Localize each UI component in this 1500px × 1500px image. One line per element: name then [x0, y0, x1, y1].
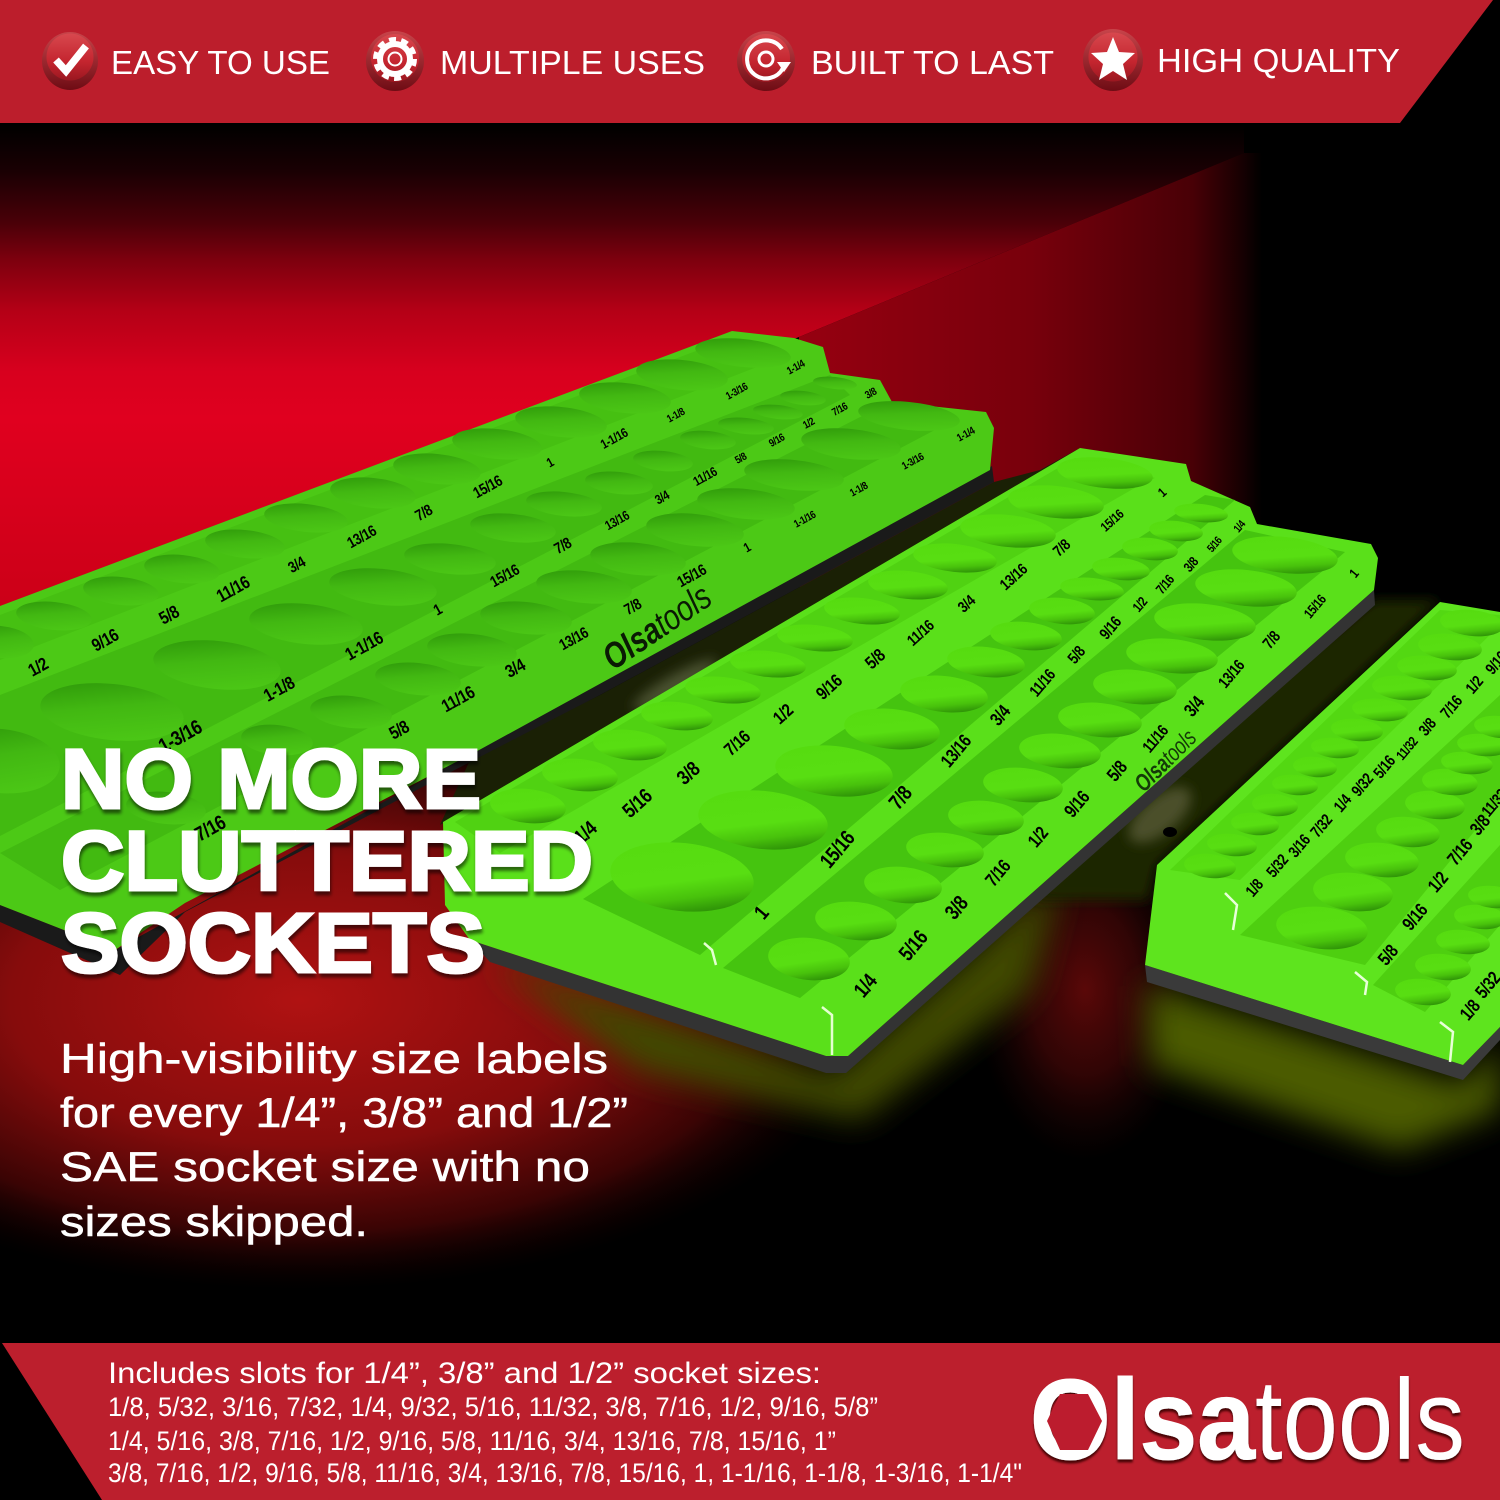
labels: back tray sizes: 3/4 [285, 554, 309, 577]
labels: middle tray sizes: 3/8 [1181, 554, 1202, 575]
labels: front tray sizes: 3/8 [1416, 715, 1440, 740]
labels: middle tray sizes: 1/2 [1130, 594, 1151, 615]
body text: for every 1/4”, 3/8” and 1/2” [60, 1089, 628, 1136]
body text: SAE socket size with no [60, 1143, 590, 1190]
labels: back tray sizes: 15/16 [674, 561, 710, 591]
labels: back tray sizes: 9/16 [88, 624, 122, 656]
feature label: multiple uses: MULTIPLE USES [440, 44, 705, 81]
logo: Olsatools: Olsa [1030, 1357, 1256, 1484]
labels: back tray sizes: 1-1/8 [260, 672, 298, 706]
labels: front tray sizes [1243, 649, 1500, 1024]
labels: back tray sizes: 1-1/8 [848, 480, 871, 500]
labels: back tray sizes: 15/16 [470, 472, 506, 502]
labels: middle tray sizes: 7/8 [885, 782, 918, 814]
labels: middle tray sizes: 11/16 [904, 617, 938, 650]
labels: back tray sizes: 7/8 [412, 502, 436, 525]
labels: back tray sizes: 1-1/16 [792, 509, 819, 531]
holes: front tray front row [1394, 883, 1500, 1008]
labels: front tray sizes: 1/8 [1456, 996, 1484, 1024]
labels: back tray sizes: 1-3/16 [154, 715, 206, 757]
body text: sizes skipped. [60, 1198, 368, 1245]
tray: middle tray with three tiers [443, 448, 1378, 1073]
labels: middle tray sizes: 1/2 [769, 700, 797, 728]
holes: back tray row two [0, 375, 858, 799]
labels: front tray sizes: 1/2 [1463, 673, 1487, 698]
labels: back tray sizes: 9/16 [767, 431, 788, 450]
labels: middle tray sizes: 11/16 [1140, 722, 1173, 757]
labels: back tray sizes: 7/8 [621, 596, 645, 619]
labels: back tray sizes: 3/4 [501, 654, 530, 682]
labels: middle tray sizes: 3/8 [672, 757, 704, 789]
icon: gear button [366, 31, 424, 91]
holes: middle tray row two [607, 501, 1229, 918]
labels: back tray sizes: 1 [544, 454, 557, 471]
labels: front tray sizes: 3/8 [1466, 811, 1494, 839]
icon: star button [1083, 29, 1143, 91]
labels: back tray sizes: 5/8 [155, 601, 183, 629]
labels: back tray sizes: 7/8 [551, 535, 575, 558]
labels: middle tray sizes: 3/4 [986, 701, 1015, 730]
holes: back tray row one [0, 334, 792, 661]
holes: back tray row three [125, 397, 961, 828]
labels: middle tray sizes: 7/8 [1260, 628, 1284, 653]
labels: middle tray sizes: 3/4 [1180, 692, 1209, 721]
labels: back tray sizes: 1 [741, 539, 754, 556]
socket size list: 3/8, 7/16, 1/2, 9/16, 5/8, 11/16, 3/4, 13/16, 7/8, 15/16, 1, 1-1/16, 1-1/8, 1-3/16, 1-1/4" [108, 1458, 1022, 1488]
labels: middle tray sizes: 1 [1155, 485, 1170, 500]
labels: middle tray sizes: 15/16 [816, 827, 860, 873]
labels: back tray sizes: 1/2 [24, 653, 52, 681]
labels: middle tray sizes: 5/8 [1103, 757, 1131, 785]
labels: back tray sizes: 3/4 [652, 487, 672, 508]
labels: middle tray sizes: 5/16 [895, 927, 933, 966]
labels: back tray sizes: 11/16 [690, 464, 720, 489]
labels: middle tray sizes: 1/4 [1232, 518, 1249, 535]
labels: back tray sizes: 15/16 [487, 561, 523, 591]
labels: back tray sizes: 1-1/4 [785, 358, 808, 378]
labels: back tray sizes: 13/16 [556, 624, 592, 654]
labels: middle tray sizes: 7/8 [1050, 536, 1074, 561]
labels: back tray sizes: 1-1/16 [598, 425, 631, 452]
heading: CLUTTERED [61, 814, 593, 908]
labels: back tray sizes: 5/8 [385, 716, 413, 744]
labels: back tray sizes: 11/16 [213, 572, 253, 607]
labels: front tray sizes: 9/32 [1349, 771, 1378, 800]
socket size list: 1/4, 5/16, 3/8, 7/16, 1/2, 9/16, 5/8, 11/16, 3/4, 13/16, 7/8, 15/16, 1” [108, 1426, 836, 1456]
labels: front tray sizes: 1/4 [1331, 791, 1356, 816]
labels: back tray sizes: 1-1/16 [341, 627, 387, 665]
labels: back tray sizes [24, 358, 978, 846]
labels: front tray sizes: 1/8 [1243, 876, 1267, 901]
labels: front tray sizes: 3/16 [1286, 832, 1315, 861]
icon: cycle gear button [737, 31, 795, 91]
labels: middle tray sizes: 1/4 [569, 816, 602, 848]
labels: middle tray sizes: 1 [750, 902, 774, 924]
feature label: easy to use: EASY TO USE [111, 44, 330, 81]
socket size list: 1/8, 5/32, 3/16, 7/32, 1/4, 9/32, 5/16, 11/32, 3/8, 7/16, 1/2, 9/16, 5/8” [108, 1392, 878, 1422]
labels: middle tray sizes: 7/16 [1153, 572, 1178, 597]
labels: middle tray sizes: 7/16 [720, 726, 754, 760]
labels: front tray sizes: 1/2 [1424, 868, 1452, 896]
labels: back tray sizes: 1/2 [801, 416, 818, 432]
icon: check mark button [42, 32, 98, 90]
labels: back tray sizes: 13/16 [602, 507, 632, 533]
labels: middle tray sizes: 1/2 [1024, 823, 1052, 851]
labels: middle tray sizes: 13/16 [1215, 657, 1249, 692]
labels: back tray sizes: 1-3/16 [724, 381, 751, 403]
labels: middle tray sizes: 5/8 [861, 645, 889, 673]
labels: back tray sizes: 5/8 [733, 451, 750, 467]
holes: front tray middle row [1274, 713, 1500, 954]
labels: middle tray sizes: 1/4 [850, 970, 883, 1002]
holes: front tray small row [1183, 607, 1500, 881]
labels: middle tray sizes: 5/16 [1205, 535, 1225, 555]
labels: middle tray sizes: 3/8 [941, 892, 974, 924]
body text [60, 1035, 628, 1245]
labels: middle tray sizes: 11/16 [1027, 666, 1060, 701]
highlights on middle tray corners [704, 943, 832, 1055]
labels: middle tray sizes: 13/16 [937, 731, 975, 771]
top banner [0, 0, 1493, 123]
labels: middle tray sizes: 5/16 [618, 784, 656, 822]
labels: front tray sizes: 5/16 [1371, 753, 1400, 782]
body text: High-visibility size labels [60, 1035, 608, 1082]
labels: back tray sizes: 7/16 [830, 400, 851, 419]
labels: back tray sizes: 11/16 [438, 682, 478, 717]
labels: front tray sizes: 11/32 [1393, 734, 1421, 763]
labels: back tray sizes: 13/16 [344, 522, 380, 552]
holes: middle tray row three [766, 532, 1340, 984]
feature label: built to last: BUILT TO LAST [811, 44, 1054, 81]
labels: back tray sizes: 1-3/16 [900, 451, 927, 473]
labels: back tray sizes: 7/16 [191, 811, 229, 846]
labels: back tray sizes: 1 [431, 601, 446, 620]
bottom banner [2, 1343, 1500, 1500]
labels: middle tray sizes [569, 485, 1362, 1002]
holes: middle tray row one [488, 453, 1154, 827]
labels: middle tray sizes: 9/16 [1060, 787, 1094, 821]
logo on back tray: Olsatools [595, 575, 719, 678]
labels: back tray sizes: 1-1/8 [665, 406, 688, 426]
labels: front tray sizes: 7/32 [1308, 812, 1337, 841]
tray: back tray with three tiers [0, 331, 994, 975]
labels: middle tray sizes: 13/16 [997, 561, 1032, 594]
labels: front tray sizes: 7/16 [1443, 835, 1477, 869]
logo on middle tray: Olsatools [1129, 724, 1202, 797]
labels: back tray sizes: 1-1/4 [955, 425, 978, 445]
heading [61, 732, 593, 990]
socket size list [108, 1357, 1022, 1488]
labels: front tray sizes: 9/16 [1398, 900, 1432, 934]
labels: middle tray sizes: 9/16 [812, 670, 846, 704]
socket size list: Includes slots for 1/4”, 3/8” and 1/2” socket sizes: [108, 1357, 821, 1390]
tray: front right tray [1145, 602, 1500, 1080]
labels: back tray sizes: 3/8 [863, 386, 880, 402]
logo: Olsatools: tools [1255, 1357, 1465, 1484]
labels: middle tray sizes: 15/16 [1301, 592, 1329, 621]
feature label: high quality: HIGH QUALITY [1157, 42, 1400, 79]
heading: SOCKETS [61, 896, 485, 990]
labels: front tray sizes: 5/32 [1264, 852, 1293, 881]
labels: middle tray sizes: 5/8 [1065, 643, 1089, 668]
labels: middle tray sizes: 9/16 [1097, 614, 1126, 643]
highlights on front tray corners [1225, 893, 1453, 1062]
labels: middle tray sizes: 15/16 [1098, 506, 1127, 535]
logo: Olsatools [1030, 1357, 1465, 1484]
labels: middle tray sizes: 7/16 [981, 856, 1015, 890]
labels: front tray sizes: 5/8 [1374, 941, 1402, 969]
labels: front tray sizes: 7/16 [1438, 693, 1467, 722]
heading: NO MORE [61, 732, 481, 826]
labels: middle tray sizes: 3/4 [955, 592, 979, 617]
labels: middle tray sizes: 1 [1346, 566, 1362, 581]
